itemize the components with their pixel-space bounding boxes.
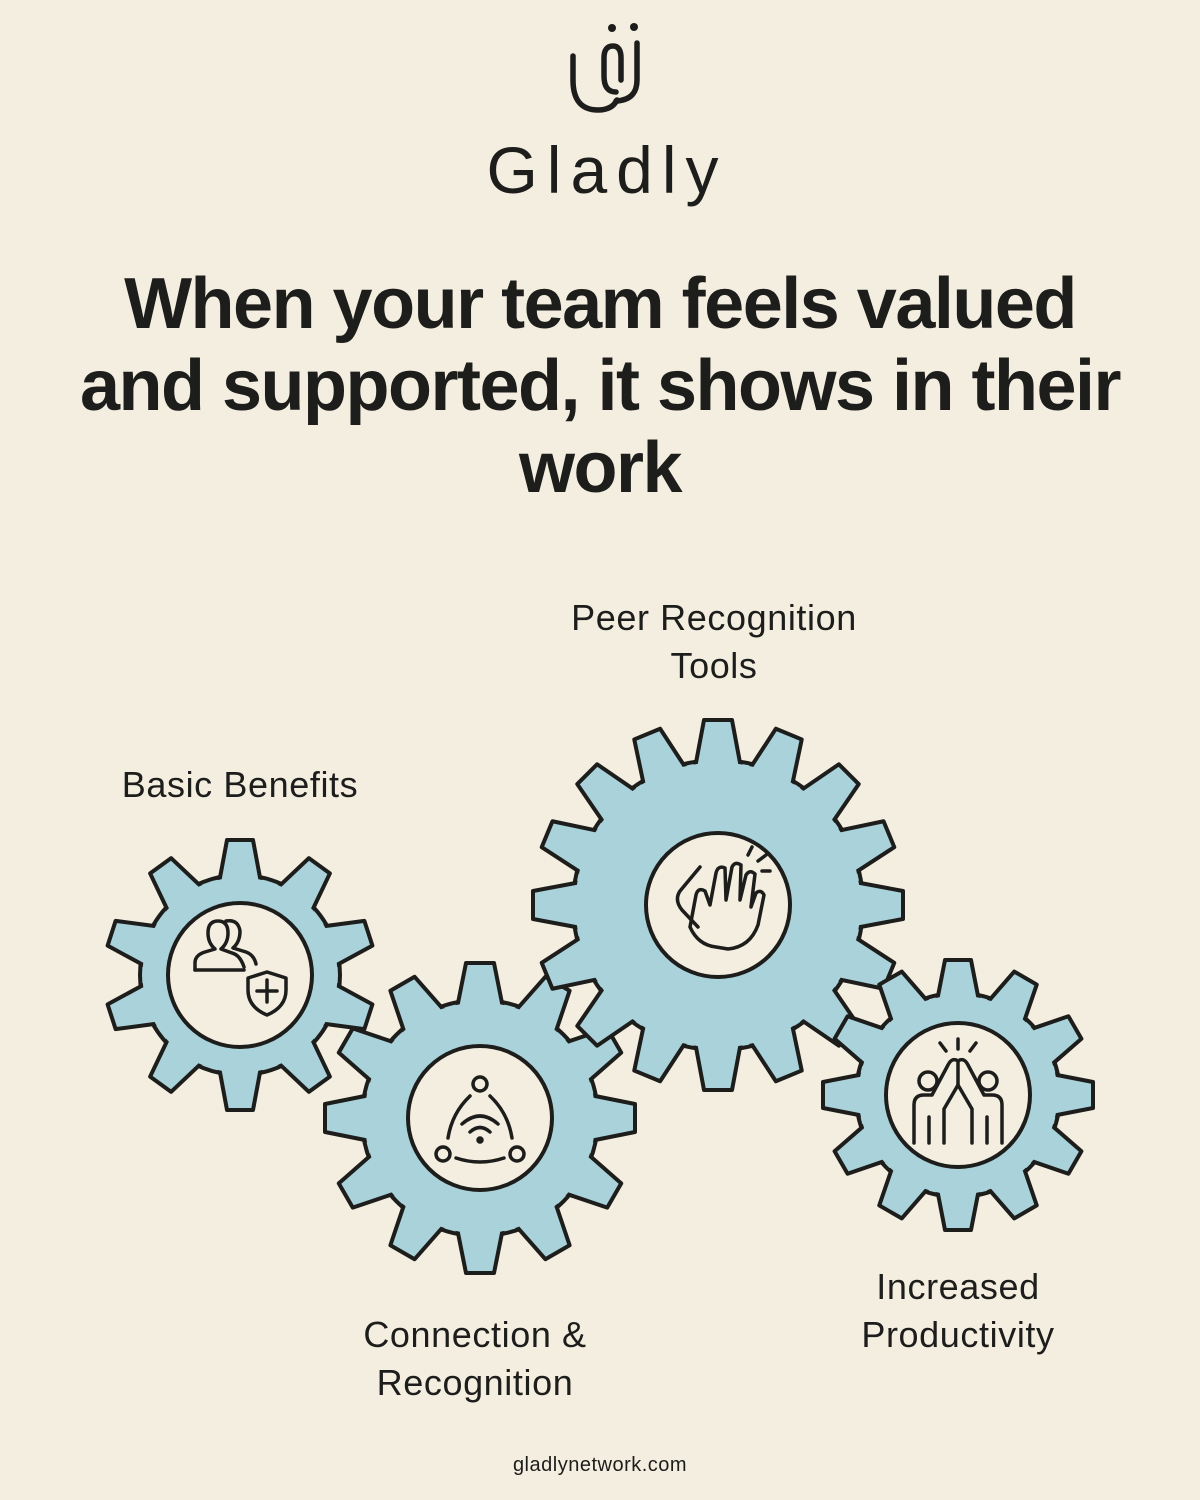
title	[80, 264, 1120, 508]
label: increased productivity	[861, 1266, 1055, 1355]
icon: high five	[914, 1039, 1002, 1143]
label: increased productivity: Increased	[876, 1266, 1040, 1307]
label: peer recognition tools	[571, 597, 857, 686]
label: basic benefits: Basic Benefits	[122, 764, 358, 805]
gear: peer recognition tools	[533, 720, 903, 1090]
label: increased productivity: Productivity	[861, 1314, 1055, 1355]
title: and supported, it shows in their	[80, 346, 1120, 426]
title: When your team feels valued	[124, 264, 1076, 344]
title: work	[519, 428, 681, 508]
icon: people with shield	[195, 921, 286, 1015]
label: peer recognition tools: Peer Recognition	[571, 597, 857, 638]
footer url: gladlynetwork.com	[513, 1454, 687, 1476]
gear: connection & recognition	[325, 963, 635, 1273]
label: connection & recognition: Recognition	[377, 1362, 573, 1403]
icon: network signal	[436, 1077, 524, 1162]
gear: increased productivity	[823, 960, 1093, 1230]
icon: clapping hands	[677, 847, 770, 949]
logo wordmark: Gladly	[486, 133, 728, 207]
gear: basic benefits	[105, 840, 375, 1110]
label: connection & recognition: Connection &	[363, 1314, 587, 1355]
label: peer recognition tools: Tools	[670, 645, 758, 686]
logo icon	[570, 23, 640, 113]
label: connection & recognition	[363, 1314, 587, 1403]
